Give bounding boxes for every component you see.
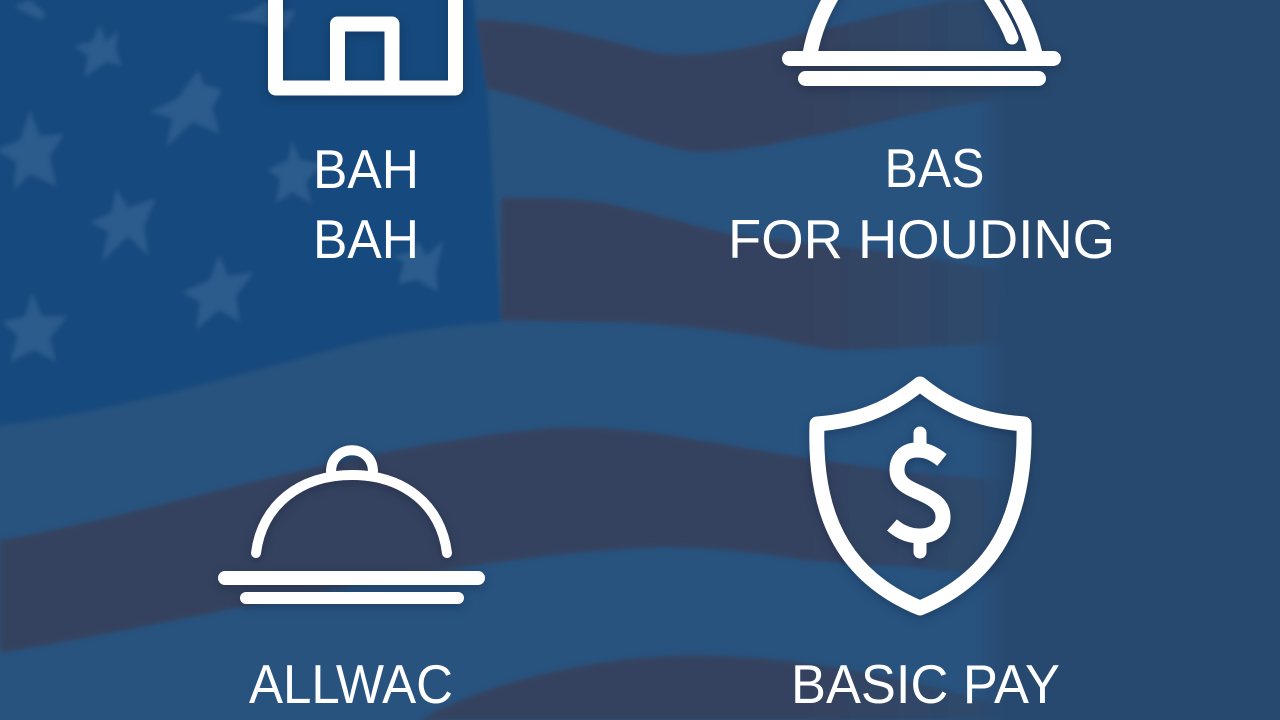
icon: serving cloche bottom [225, 450, 478, 598]
flag stars [0, 0, 444, 362]
label: BASIC PAY: BASIC PAY [791, 653, 1060, 715]
label: BAS FOR HOUDING: BAS [884, 137, 984, 199]
icon: shield with dollar sign [817, 384, 1024, 608]
icon: house (BAH) [276, 0, 456, 88]
label: BAH BAH [313, 138, 419, 270]
label: ALLWAC: ALLWAC [249, 653, 453, 715]
label: BAS FOR HOUDING [728, 137, 1115, 270]
label: BAS FOR HOUDING: FOR HOUDING [728, 208, 1115, 270]
label: BAH BAH: BAH [313, 138, 419, 200]
label: BAH BAH: BAH [313, 208, 419, 270]
icon: serving cloche top [790, 0, 1054, 78]
